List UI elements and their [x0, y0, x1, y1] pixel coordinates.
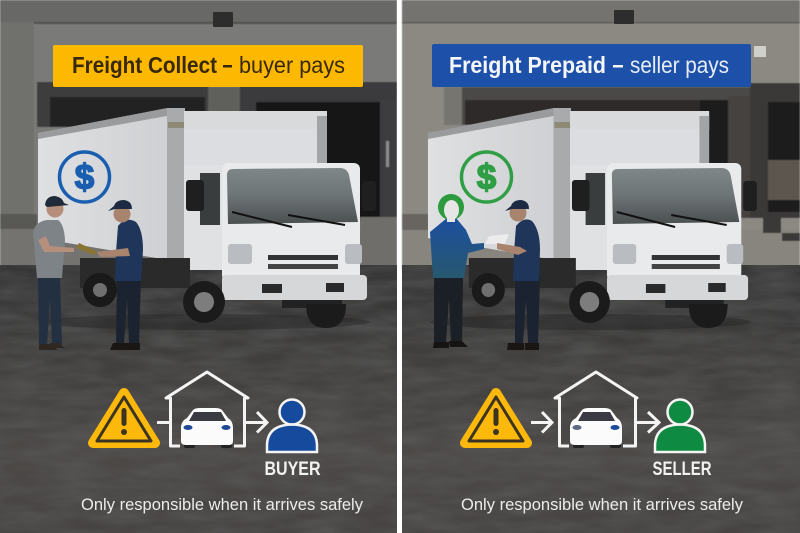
- panel: freight collect: [0, 0, 397, 533]
- banner: freight collect: [53, 45, 363, 87]
- icon: car: [181, 408, 233, 448]
- loading dock building: [0, 0, 397, 270]
- loading dock building: [402, 0, 800, 270]
- icon: arrow stub into house: [157, 421, 170, 424]
- banner: freight prepaid: Freight Prepaid: [449, 52, 606, 78]
- banner: freight collect: Freight Collect: [72, 52, 217, 78]
- wall lamp: [213, 12, 233, 27]
- ground: [0, 265, 397, 533]
- wall lamp: [614, 10, 634, 24]
- icon: warning triangle: [93, 393, 155, 443]
- caption: right: Only responsible when it arrives safely: [461, 495, 743, 514]
- caption: left: Only responsible when it arrives safely: [81, 495, 363, 514]
- icon: blue dollar circle: $: [75, 158, 94, 197]
- label: buyer: BUYER: [264, 459, 321, 480]
- ground: [402, 265, 800, 533]
- icon: arrow into house: [531, 412, 552, 432]
- icon: seller person: [655, 400, 705, 452]
- banner: freight prepaid: seller pays: [630, 52, 729, 78]
- icon: house with car: [166, 372, 248, 448]
- truck: [428, 108, 757, 330]
- panel: freight prepaid: [402, 0, 800, 533]
- truck: [38, 108, 376, 330]
- banner: freight prepaid: [432, 44, 751, 87]
- person: seller cutout figure: [430, 194, 509, 348]
- person: driver in grey shirt: [33, 196, 98, 350]
- icon: warning triangle: [465, 393, 527, 443]
- icon: green dollar circle: $: [477, 158, 496, 197]
- divider: [397, 0, 402, 533]
- icon: blue dollar circle: [60, 152, 110, 202]
- icon: car: [570, 408, 622, 448]
- person: worker in navy uniform: [497, 200, 540, 350]
- person: worker in navy uniform: [97, 200, 143, 350]
- icon: arrow to seller: [636, 412, 659, 432]
- icon: arrow to buyer: [245, 412, 267, 432]
- icon: house with car: [555, 372, 637, 448]
- banner: freight collect: buyer pays: [239, 52, 345, 78]
- icon: buyer person: [267, 400, 317, 452]
- label: seller: SELLER: [652, 459, 712, 480]
- icon: green dollar circle: [462, 152, 512, 202]
- wall light: [754, 46, 766, 57]
